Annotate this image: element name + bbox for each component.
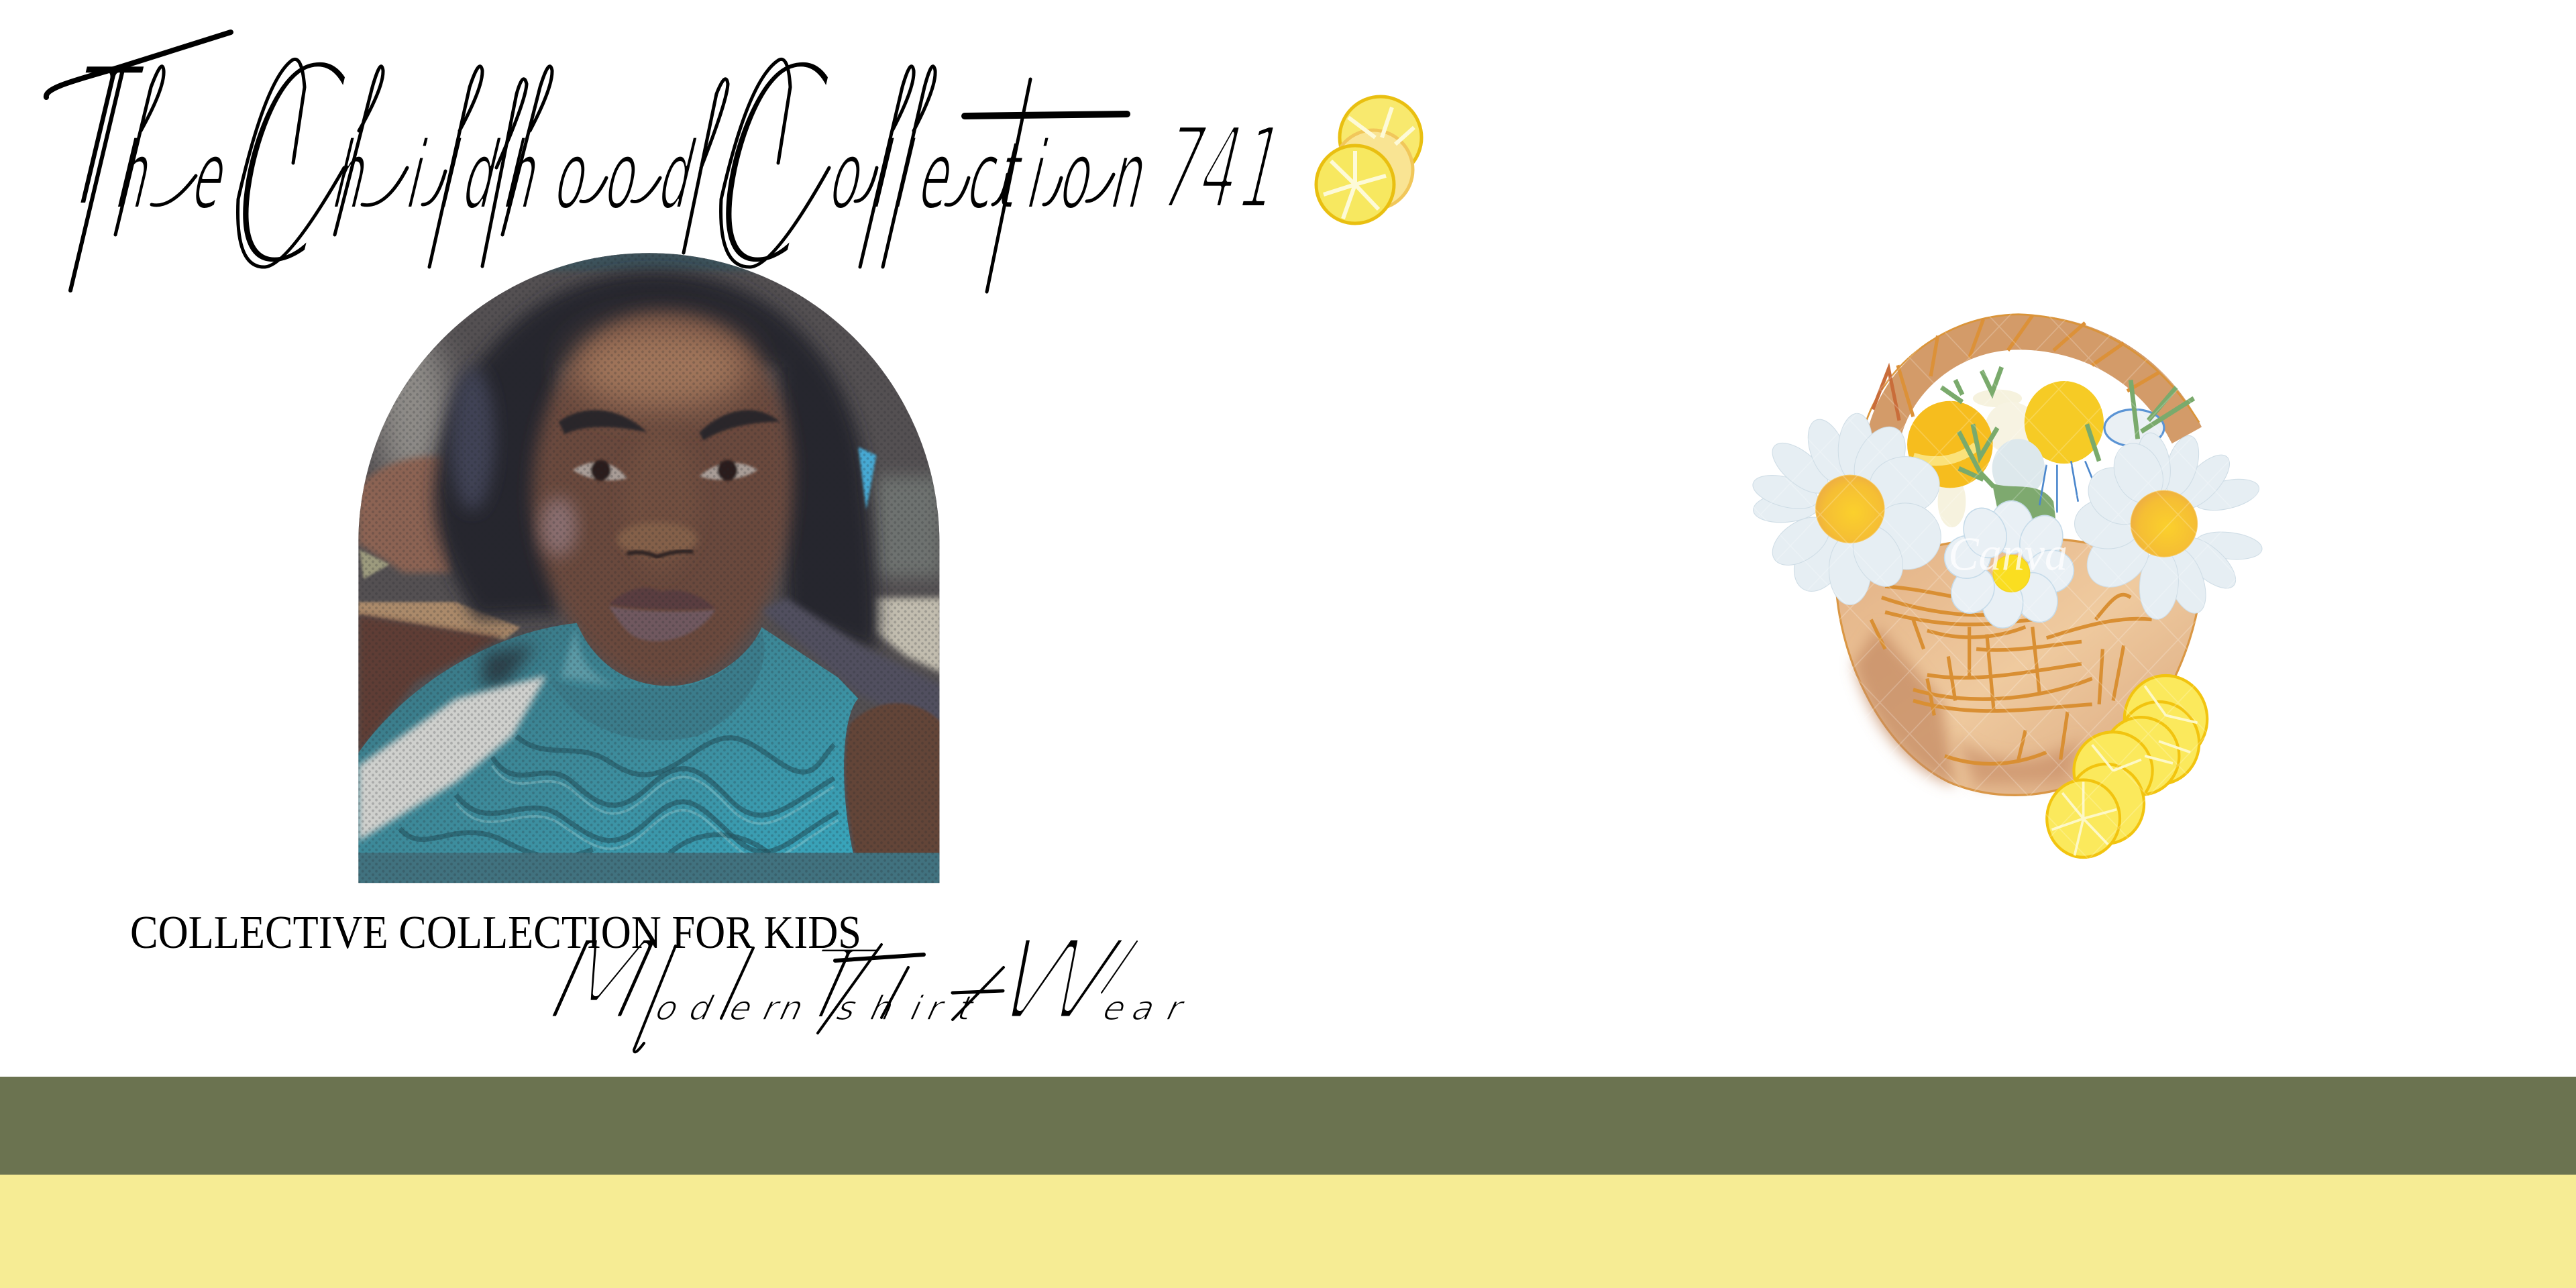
title: script brand name: llection741 (869, 102, 1289, 235)
title swash strokes (46, 32, 1127, 292)
title: script brand name: o (825, 121, 869, 231)
icon: lemon slices (1316, 97, 1421, 223)
watermark (1752, 310, 2264, 863)
title: script brand name: The (52, 22, 232, 256)
text: script tagline: Modern Tshirt Wear (537, 914, 1208, 1046)
title: script brand name: C (213, 0, 362, 335)
illustration: basket of daisies and lemons (1750, 310, 2264, 863)
daisy: right (2075, 430, 2263, 621)
back flowers and lemons (1907, 367, 2194, 531)
watermark: Canva (1948, 528, 2068, 581)
text: subtitle: COLLECTIVE COLLECTION FOR KIDS (130, 907, 861, 959)
title: script brand name: C (696, 0, 845, 335)
title: script brand name: ildhood (402, 121, 700, 231)
lemon slices beside basket (2047, 676, 2207, 857)
daisy: small centre (1941, 500, 2077, 631)
daisy: left (1750, 412, 1943, 605)
title: script brand name: h (329, 121, 374, 231)
band: olive stripe (0, 1077, 2576, 1175)
basket handle (1866, 315, 2199, 446)
band: pale yellow stripe (0, 1175, 2576, 1288)
basket body (1837, 537, 2201, 795)
tagline swash strokes (634, 941, 1137, 1052)
portrait photo in arch frame (358, 250, 943, 887)
